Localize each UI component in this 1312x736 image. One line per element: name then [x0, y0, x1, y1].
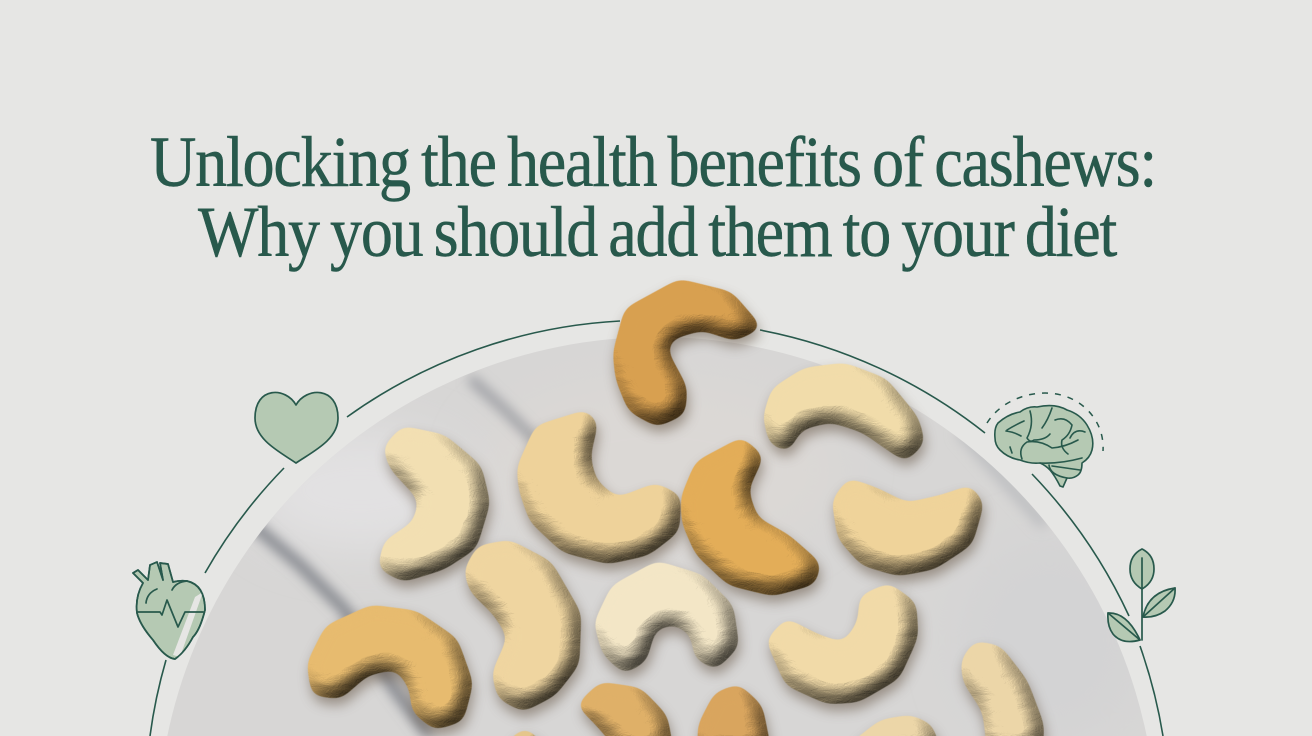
- icon: leaf sprig: [1108, 549, 1175, 642]
- cashew 12 bottom: [575, 681, 675, 736]
- title: Unlocking the health benefits of cashews:: [150, 122, 1156, 202]
- icon: brain: [995, 406, 1093, 487]
- cashew 4 centre left: [516, 409, 682, 565]
- cashew 5 golden centre: [680, 436, 822, 597]
- cashew 1 brown top: [612, 278, 764, 428]
- cashew 10 lower right: [765, 582, 919, 705]
- cashew 15 bottom left: [495, 726, 553, 736]
- cashew 14 bottom right: [847, 714, 943, 736]
- cashew 13 bottom: [697, 683, 773, 736]
- icon: dashed brain halo: [987, 393, 1103, 451]
- cashews: [306, 278, 1045, 736]
- cashew 8 golden arch lower left: [306, 604, 474, 731]
- title: Why you should add them to your diet: [198, 192, 1117, 272]
- cashew 3 pale left: [377, 425, 491, 583]
- cashew 9 split pale centre: [593, 560, 740, 675]
- icon: heart: [255, 392, 338, 463]
- decorative arc segments: [150, 321, 1163, 736]
- title: [150, 122, 1156, 272]
- cashew 2 pale top right: [762, 362, 926, 463]
- cashew 11 far right: [960, 640, 1045, 736]
- cashew 6 pale right: [831, 477, 985, 577]
- icon: anatomical heart: [133, 562, 205, 659]
- cashew 7 long lower: [463, 539, 582, 713]
- marble plate: [150, 330, 1160, 736]
